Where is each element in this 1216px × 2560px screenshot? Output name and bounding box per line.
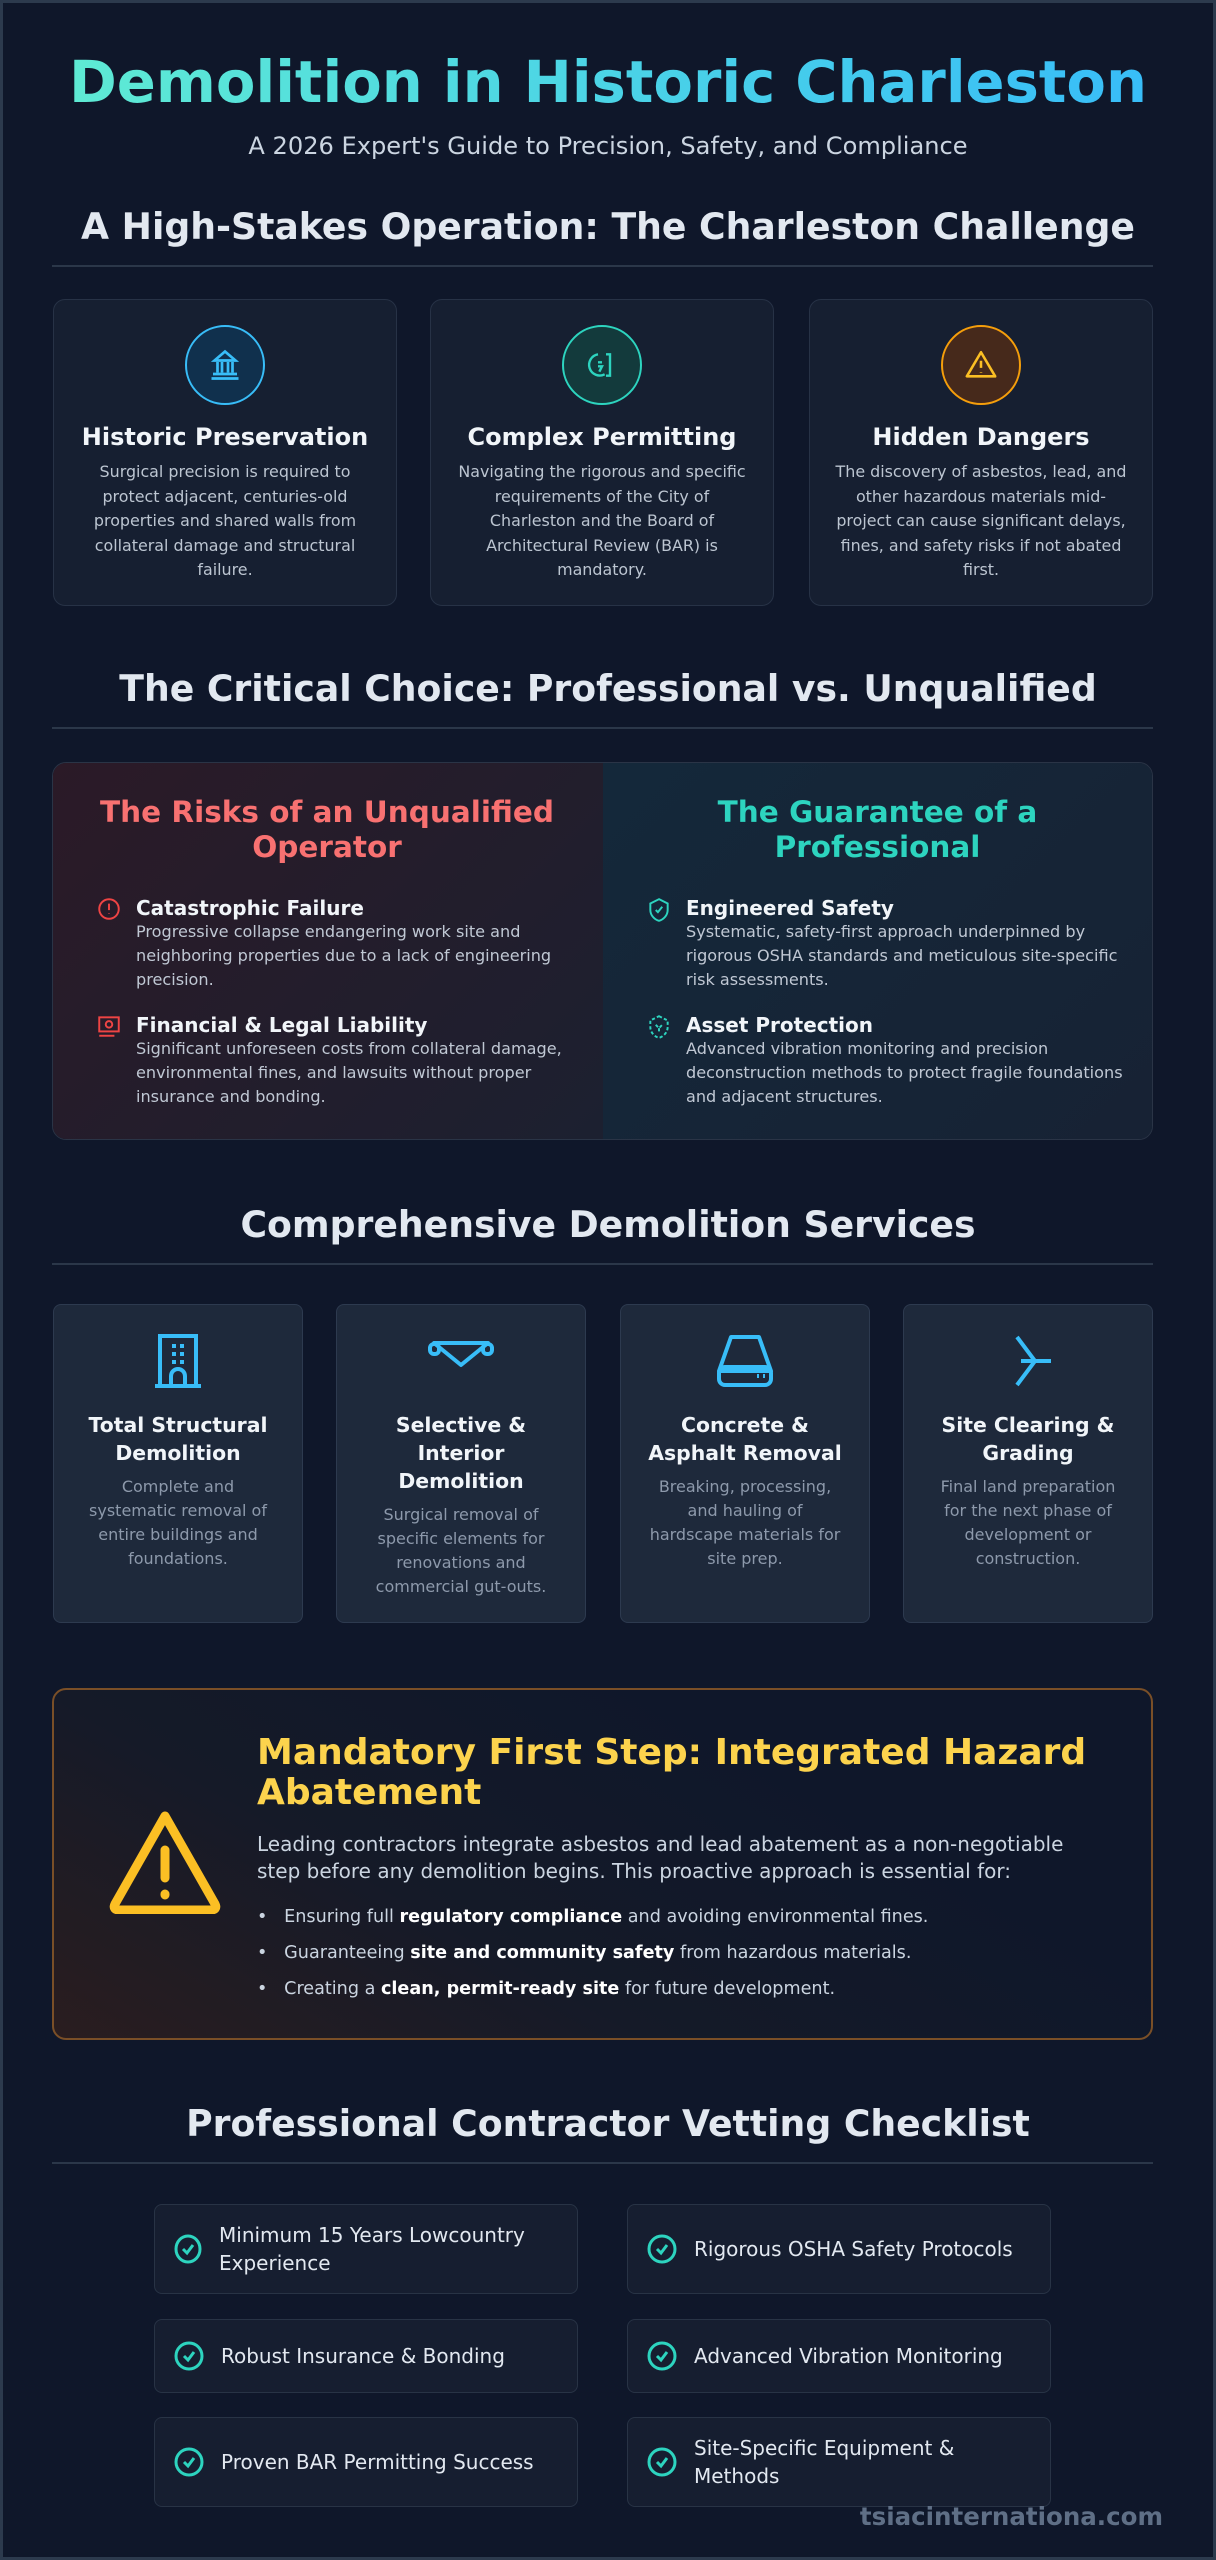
card: total structural: systematic removal of <box>89 1501 267 1520</box>
icon: arrow <box>1016 1336 1051 1386</box>
callout: hazard abatement <box>52 1688 1153 2040</box>
card: site clearing: development or <box>964 1525 1092 1544</box>
heading: services: Comprehensive Demolition Services <box>240 1203 976 1246</box>
card: concrete asphalt: Concrete & <box>681 1413 809 1437</box>
card: total structural: entire buildings and <box>98 1525 258 1544</box>
card: hidden dangers <box>809 299 1153 606</box>
checklist item 5 <box>154 2417 578 2507</box>
heading: critical choice: The Critical Choice: Professional vs. Unqualified <box>119 667 1097 710</box>
heading: risks: Operator <box>252 830 402 864</box>
checklist item 6: Site-Specific Equipment & Methods <box>694 2436 954 2488</box>
heading: risks <box>100 795 554 864</box>
checklist item 3: Robust Insurance & Bonding <box>221 2344 505 2368</box>
heading: challenge: A High-Stakes Operation: The Charleston Challenge <box>81 205 1135 248</box>
card: concrete asphalt: hardscape materials for <box>650 1525 840 1544</box>
card: complex permitting <box>430 299 774 606</box>
card: total structural: Total Structural <box>89 1413 267 1437</box>
item: catastrophic failure: Progressive collapse endangering work site and neighboring properties due to a lack of engineering precision. <box>136 922 551 989</box>
card: concrete asphalt: Asphalt Removal <box>648 1441 842 1465</box>
watermark: tsiacinternationa.com <box>860 2502 1163 2531</box>
card: complex permitting: Navigating the rigorous and specific requirements of the City of Charleston and the Board of Architectural Review (BAR) is mandatory. <box>458 462 746 579</box>
checklist item 2: Rigorous OSHA Safety Protocols <box>694 2237 1013 2261</box>
card: concrete asphalt <box>620 1304 870 1623</box>
card: site clearing: construction. <box>976 1549 1080 1568</box>
checklist item 2 <box>627 2204 1051 2294</box>
panel: risks <box>53 763 603 1141</box>
hazard bullets: • Creating a clean, permit-ready site for future development. <box>257 1979 835 1999</box>
checklist item 1 <box>154 2204 578 2294</box>
card: selective interior: commercial gut-outs. <box>376 1577 546 1596</box>
card: site clearing: for the next phase of <box>944 1501 1112 1520</box>
checklist item 4 <box>627 2319 1051 2393</box>
icon: wrecking <box>428 1341 494 1368</box>
icon: warning triangle <box>110 1812 220 1914</box>
hazard bullets <box>257 1907 928 1999</box>
card: total structural: foundations. <box>128 1549 228 1568</box>
card: selective interior: specific elements for <box>378 1529 544 1548</box>
hazard text <box>257 1832 1063 1883</box>
heading: guarantee <box>718 795 1037 864</box>
icon: drive <box>717 1335 774 1387</box>
panel: comparison <box>52 762 1153 1140</box>
card: hidden dangers: The discovery of asbestos, lead, and other hazardous materials mid-project can cause significant delays, fines, and safety risks if not abated first. <box>836 462 1126 579</box>
hazard heading: Mandatory First Step: Integrated Hazard Abatement <box>257 1732 1086 1813</box>
checklist item 6 <box>627 2417 1051 2507</box>
card: selective interior: Surgical removal of <box>384 1505 538 1524</box>
card: total structural: Complete and <box>122 1477 234 1496</box>
card: historic preservation: Historic Preservation <box>82 423 368 451</box>
title: Demolition in Historic Charleston <box>69 49 1147 116</box>
card: total structural <box>53 1304 303 1623</box>
card: selective interior <box>336 1304 586 1623</box>
hazard bullets: • Guaranteeing site and community safety from hazardous materials. <box>257 1943 911 1963</box>
card: selective interior: Selective & <box>396 1413 526 1437</box>
checklist item 3 <box>154 2319 578 2393</box>
card: concrete asphalt: Breaking, processing, <box>659 1477 831 1496</box>
icon: building <box>185 325 265 405</box>
item: engineered safety: Systematic, safety-first approach underpinned by rigorous OSHA standards and meticulous site-specific risk assessments. <box>686 922 1117 989</box>
panel: guarantee <box>603 763 1154 1141</box>
hazard text: Leading contractors integrate asbestos and lead abatement as a non-negotiable <box>257 1832 1063 1856</box>
card: site clearing: Final land preparation <box>941 1477 1115 1496</box>
item: catastrophic failure: Catastrophic Failure <box>136 896 364 920</box>
item: financial liability: Financial & Legal Liability <box>136 1013 427 1037</box>
item: asset protection: Asset Protection <box>686 1013 873 1037</box>
card: site clearing: Site Clearing & <box>942 1413 1114 1437</box>
subtitle: A 2026 Expert's Guide to Precision, Safety, and Compliance <box>248 132 968 160</box>
checklist item 5: Proven BAR Permitting Success <box>221 2450 534 2474</box>
card: historic preservation <box>53 299 397 606</box>
item: asset protection <box>649 1013 1123 1106</box>
item: engineered safety: Engineered Safety <box>686 896 894 920</box>
item: financial liability: Significant unforeseen costs from collateral damage, environmental fines, and lawsuits without proper insurance and bonding. <box>136 1039 562 1106</box>
icon: permit <box>562 325 642 405</box>
heading: risks: The Risks of an Unqualified <box>100 795 554 829</box>
card: site clearing: Grading <box>982 1441 1074 1465</box>
card: selective interior: Interior <box>418 1441 504 1465</box>
heading: guarantee: Professional <box>775 830 980 864</box>
card: complex permitting: Complex Permitting <box>467 423 736 451</box>
item: asset protection: Advanced vibration monitoring and precision deconstruction methods to protect fragile foundations and adjacent structures. <box>686 1039 1123 1106</box>
hazard bullets: • Ensuring full regulatory compliance and avoiding environmental fines. <box>257 1907 928 1927</box>
card: site clearing <box>903 1304 1153 1623</box>
icon: warning <box>941 325 1021 405</box>
hazard text: step before any demolition begins. This proactive approach is essential for: <box>257 1859 1011 1883</box>
card: historic preservation: Surgical precision is required to protect adjacent, centuries-old properties and shared walls from collateral damage and structural failure. <box>94 462 356 579</box>
icon: building <box>155 1334 201 1388</box>
heading: guarantee: The Guarantee of a <box>718 795 1037 829</box>
card: concrete asphalt: and hauling of <box>688 1501 802 1520</box>
item: financial liability <box>98 1013 562 1106</box>
item: catastrophic failure <box>98 896 551 989</box>
card: selective interior: renovations and <box>396 1553 526 1572</box>
checklist item 4: Advanced Vibration Monitoring <box>694 2344 1003 2368</box>
card: hidden dangers: Hidden Dangers <box>872 423 1090 451</box>
item: engineered safety <box>649 896 1117 989</box>
checklist item 1: Minimum 15 Years Lowcountry Experience <box>219 2223 525 2275</box>
card: concrete asphalt: site prep. <box>707 1549 783 1568</box>
card: selective interior: Demolition <box>398 1469 524 1493</box>
card: total structural: Demolition <box>115 1441 241 1465</box>
heading: checklist: Professional Contractor Vetting Checklist <box>186 2102 1030 2145</box>
